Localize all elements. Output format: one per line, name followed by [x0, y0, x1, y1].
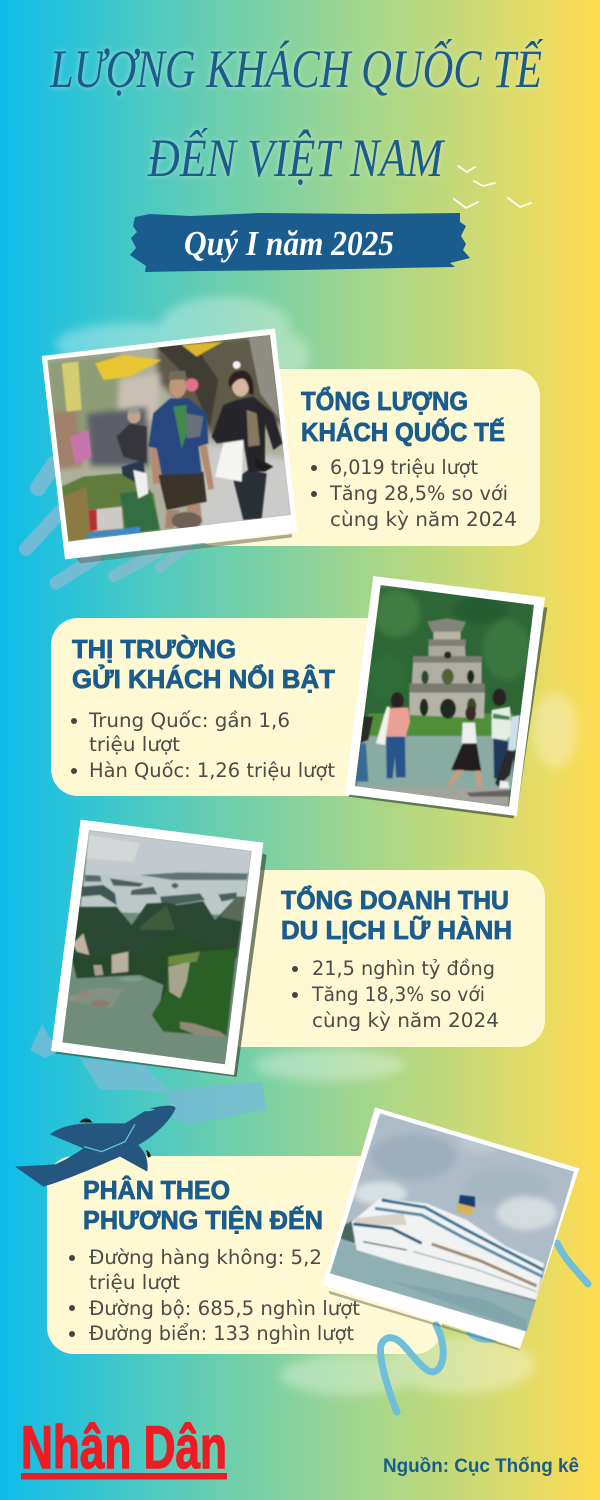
decorative brush strokes [26, 464, 188, 583]
bullet list: Đường bộ: 685,5 nghìn lượt [89, 1297, 360, 1320]
subtitle banner [130, 213, 470, 272]
panel background [215, 870, 545, 1047]
bullet list: cùng kỳ năm 2024 [330, 508, 517, 531]
bullet list: Hàn Quốc: 1,26 triệu lượt [89, 759, 335, 782]
heading: PHƯƠNG TIỆN ĐẾN [83, 1205, 323, 1235]
heading [72, 634, 335, 694]
logo: Nhan Dan: Nhân Dân [21, 1414, 227, 1481]
bullet list: triệu lượt [89, 733, 180, 756]
bullet list [311, 456, 517, 531]
title [49, 38, 544, 188]
bullet list [71, 709, 335, 782]
bullet list: Đường hàng không: 5,2 [89, 1246, 322, 1269]
photo: Turtle Tower [345, 576, 547, 818]
bullet list [69, 1246, 360, 1345]
bullet list: Tăng 18,3% so với [311, 983, 485, 1006]
panel: by means of arrival [47, 1107, 588, 1412]
subtitle banner: Quý I năm 2025 [184, 224, 394, 263]
bullet list: 6,019 triệu lượt [330, 456, 478, 479]
panel background [47, 1156, 442, 1354]
title: ĐẾN VIỆT NAM [147, 127, 445, 188]
heading [281, 885, 512, 945]
heading: TỔNG LƯỢNG [301, 386, 468, 416]
heading [83, 1175, 323, 1235]
bullet list: Đường biển: 133 nghìn lượt [89, 1322, 354, 1345]
icon: airplane [15, 1106, 176, 1187]
decorative clouds [55, 297, 577, 1395]
heading: THỊ TRƯỜNG [72, 634, 236, 664]
heading: KHÁCH QUỐC TẾ [301, 417, 505, 447]
photo: tourists walking [42, 328, 297, 563]
bullet list: triệu lượt [89, 1271, 180, 1294]
photo: Ha Long Bay [51, 820, 267, 1077]
panel: travel revenue [51, 820, 545, 1077]
heading: GỬI KHÁCH NỔI BẬT [72, 663, 335, 694]
icon: birds [454, 166, 531, 208]
bullet list [292, 957, 499, 1032]
heading: TỔNG DOANH THU [281, 885, 509, 915]
heading: PHÂN THEO [83, 1175, 230, 1205]
decorative squiggle [381, 1243, 588, 1412]
panel background [51, 618, 391, 796]
decorative blue patches [30, 1024, 266, 1124]
panel: total visitors [42, 328, 540, 563]
heading [301, 386, 505, 447]
photo: cruise ship [323, 1107, 580, 1351]
bullet list: Tăng 28,5% so với [329, 482, 508, 505]
heading: DU LỊCH LỮ HÀNH [281, 915, 512, 945]
bullet list: Trung Quốc: gần 1,6 [88, 709, 290, 732]
source note: Nguồn: Cục Thống kê [383, 1456, 579, 1477]
bullet list: 21,5 nghìn tỷ đồng [312, 957, 495, 980]
bullet list: cùng kỳ năm 2024 [312, 1009, 499, 1032]
panel: key source markets [51, 576, 547, 818]
panel background [190, 369, 540, 546]
